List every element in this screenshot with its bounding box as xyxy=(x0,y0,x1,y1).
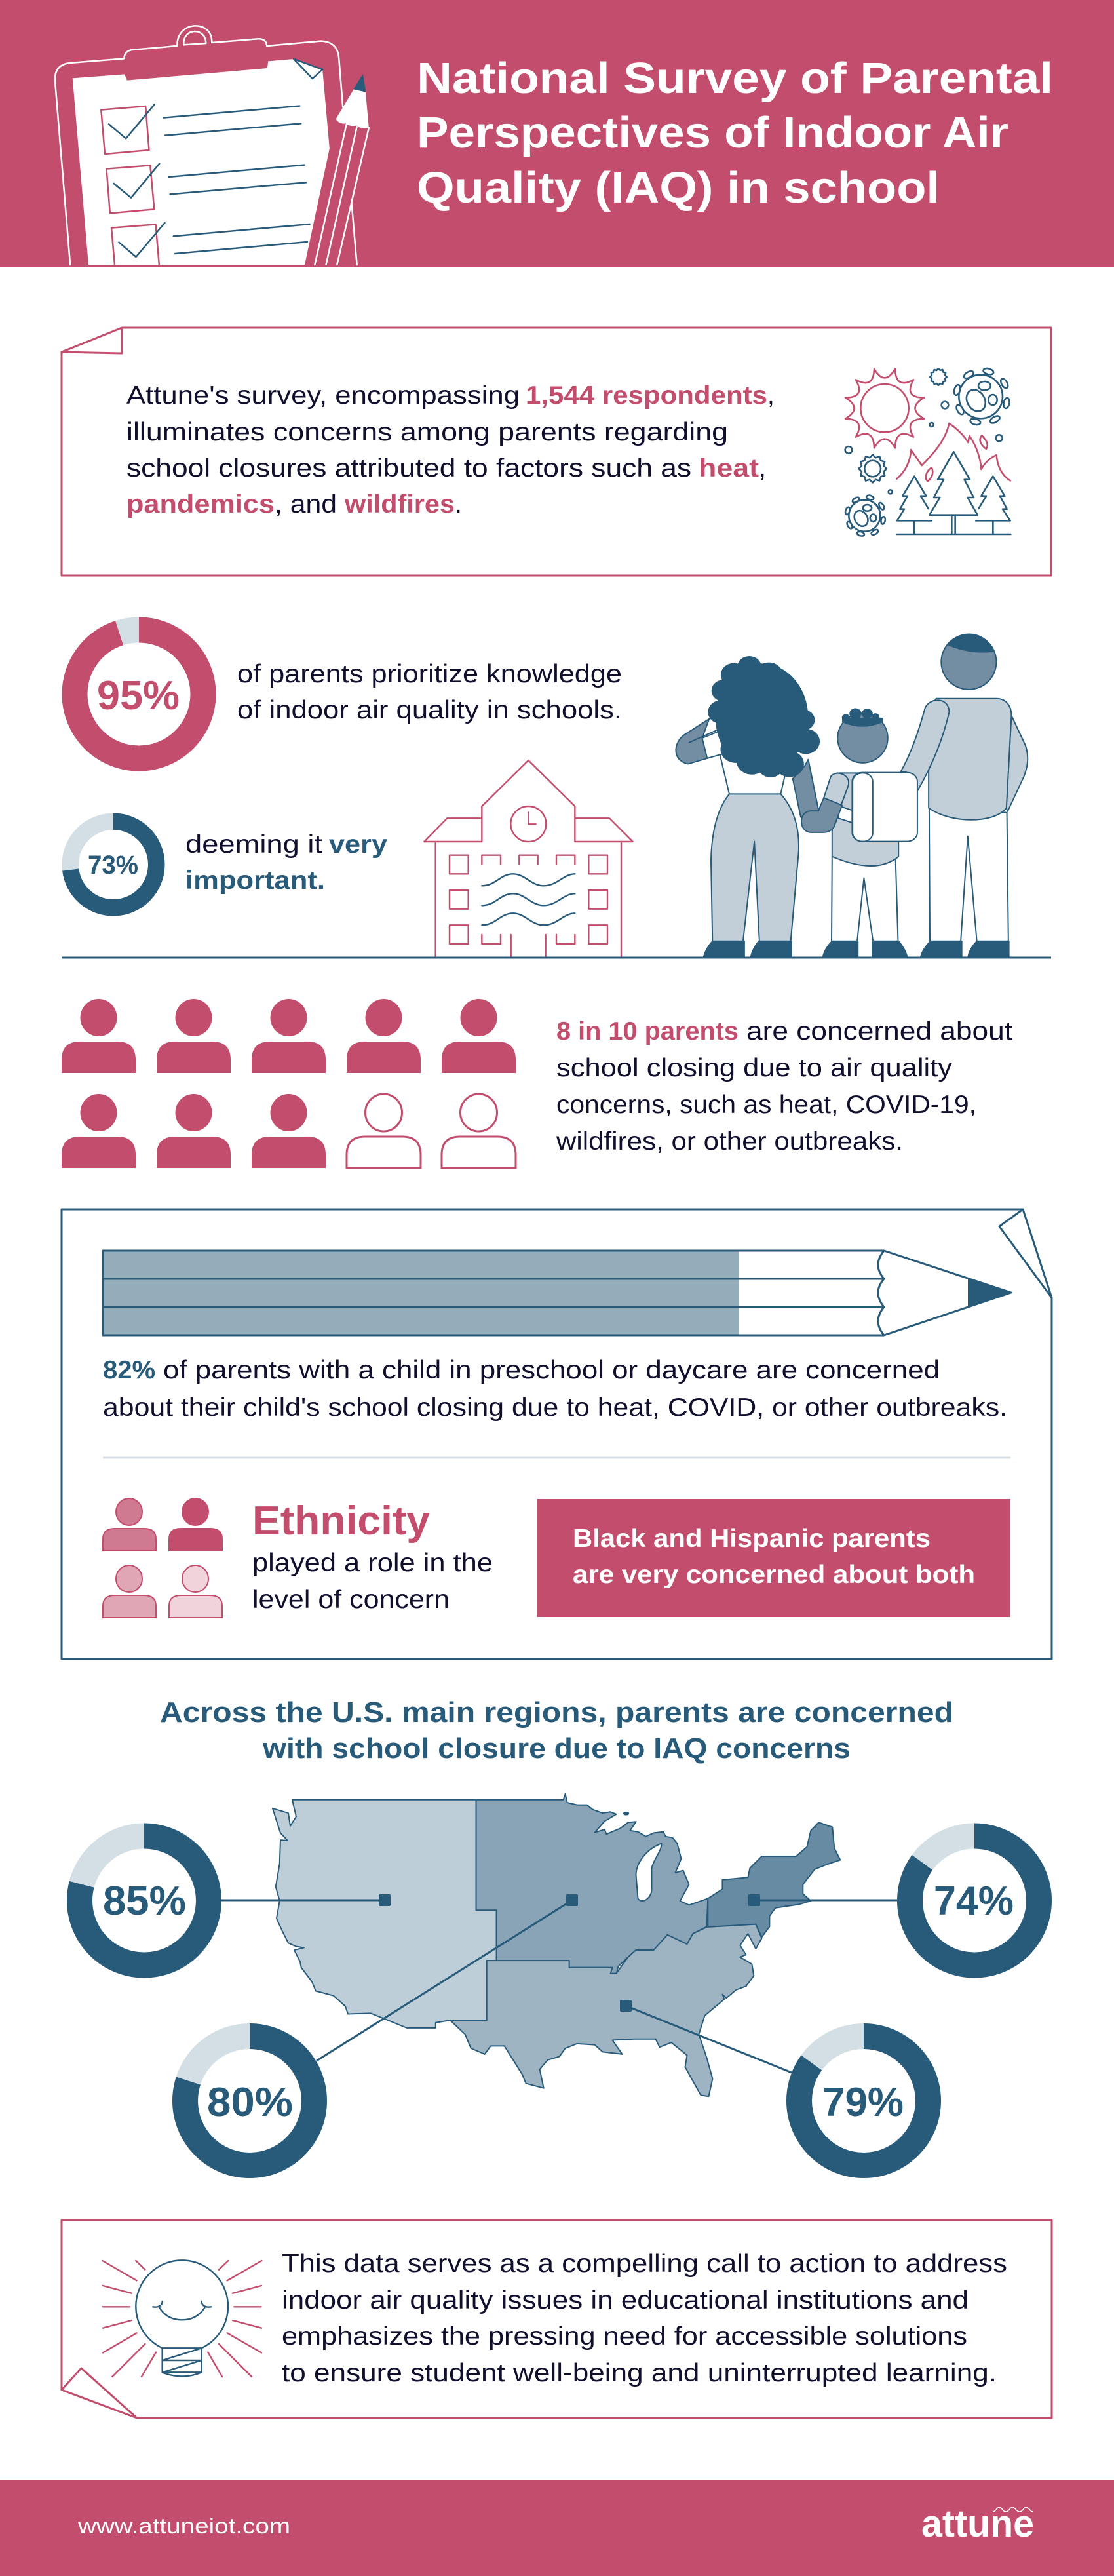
chart: Northeast donut 74% xyxy=(910,1836,1039,1965)
panel: call to action xyxy=(62,2220,1052,2418)
region: Midwest xyxy=(476,1794,708,1974)
text: 8 in 10 parents: school closing due to air quality xyxy=(556,1054,953,1082)
panel: preschool and ethnicity xyxy=(62,1209,1052,1659)
illustration: family seen from behind xyxy=(676,634,1028,958)
text: ethnicity: level of concern xyxy=(252,1586,450,1614)
text: 82% of parents: about their child's school closing due to heat, COVID, or other outbreaks. xyxy=(103,1394,1007,1422)
man xyxy=(900,634,1028,958)
intro text: heat xyxy=(699,454,759,482)
icon: smiling light bulb xyxy=(102,2260,261,2377)
chart: 73% donut: 73% xyxy=(88,851,138,880)
lake michigan xyxy=(636,1843,661,1901)
title: Perspectives of Indoor Air xyxy=(417,108,1008,157)
intro text xyxy=(126,381,775,518)
chart: South donut 79%: 79% xyxy=(822,2080,904,2125)
region: Northeast xyxy=(708,1822,840,1937)
chart: 95% donut xyxy=(75,630,203,758)
chart: West donut 85%: 85% xyxy=(103,1879,186,1924)
chart: West donut 85% xyxy=(80,1836,208,1965)
intro text: Attune's survey, encompassing xyxy=(126,381,520,410)
callout: Black and Hispanic parents: are very concerned about both xyxy=(573,1561,975,1589)
heading: regions: Across the U.S. main regions, parents are concerned xyxy=(160,1696,953,1728)
woman xyxy=(676,656,820,958)
text: 8 in 10 parents xyxy=(556,1017,1012,1156)
heading: regions: with school closure due to IAQ concerns xyxy=(262,1732,851,1765)
callout: Black and Hispanic parents xyxy=(537,1499,1010,1617)
panel outline with folded corner xyxy=(62,328,1051,576)
chart: 95% donut: 95% xyxy=(97,673,180,718)
intro text: , and xyxy=(275,490,337,518)
text: 82% of parents: of parents with a child in preschool or daycare are concerned xyxy=(163,1356,940,1384)
title: Quality (IAQ) in school xyxy=(417,163,940,212)
header banner xyxy=(0,0,1114,267)
text: 82% of parents xyxy=(103,1356,1007,1422)
intro text: pandemics xyxy=(126,490,275,518)
text: 8 in 10 parents: wildfires, or other outbreaks. xyxy=(556,1127,903,1156)
text: deeming it very important: deeming it xyxy=(185,830,322,859)
text: 8 in 10 parents: concerns, such as heat, COVID-19, xyxy=(556,1091,976,1119)
region: South xyxy=(450,1924,761,2096)
chart: South donut 79% xyxy=(799,2036,928,2166)
chart: Midwest donut 80% xyxy=(185,2036,315,2166)
intro text: , xyxy=(767,381,775,410)
chart: pencil progress bar 82% xyxy=(103,1251,1011,1335)
callout: Black and Hispanic parents: Black and Hispanic parents xyxy=(573,1525,931,1553)
icon: four people in varying shades xyxy=(103,1498,222,1618)
text: 95% of parents: of indoor air quality in schools. xyxy=(237,696,622,724)
intro text: , xyxy=(759,454,766,482)
icon: school building xyxy=(424,760,633,958)
text: ethnicity xyxy=(252,1498,493,1614)
chart: 73% donut xyxy=(70,821,157,908)
intro text: . xyxy=(455,490,462,518)
title: National Survey of Parental xyxy=(417,54,1053,103)
connector lines and markers xyxy=(221,1894,897,2073)
text: ethnicity: played a role in the xyxy=(252,1549,493,1577)
icon: sun, viruses, wildfire and trees xyxy=(845,367,1010,537)
text: deeming it very important: very xyxy=(329,830,387,859)
child xyxy=(801,708,917,958)
text: 8 in 10 parents: are concerned about xyxy=(746,1017,1012,1045)
text: ethnicity: Ethnicity xyxy=(252,1498,431,1544)
text: call to action xyxy=(282,2250,1007,2387)
intro text: 1,544 respondents xyxy=(526,381,767,410)
text: call to action: This data serves as a compelling call to action to address xyxy=(282,2250,1007,2278)
isle royale xyxy=(623,1812,629,1816)
chart: Midwest donut 80%: 80% xyxy=(207,2080,293,2125)
footer xyxy=(0,2480,1114,2576)
text: 8 in 10 parents: 8 in 10 parents xyxy=(556,1017,739,1045)
website: www.attuneiot.com xyxy=(77,2514,290,2538)
icon: clipboard with checklist and pencil xyxy=(55,26,369,265)
text: 95% of parents xyxy=(237,660,622,724)
text: 95% of parents: of parents prioritize knowledge xyxy=(237,660,622,688)
intro text: illuminates concerns among parents regarding xyxy=(126,418,728,446)
text: 82% of parents: 82% xyxy=(103,1356,155,1384)
map: contiguous US by region xyxy=(273,1794,840,2096)
ground line xyxy=(62,957,1051,958)
text: deeming it very important: important. xyxy=(185,867,325,895)
panel outline with folded corner xyxy=(62,1209,1052,1659)
title xyxy=(417,54,1053,212)
panel: intro survey summary xyxy=(62,328,1051,576)
text: call to action: emphasizes the pressing need for accessible solutions xyxy=(282,2322,967,2351)
intro text: wildfires xyxy=(344,490,455,518)
text: deeming it very important xyxy=(185,830,387,895)
chart: Northeast donut 74%: 74% xyxy=(934,1879,1014,1924)
text: call to action: to ensure student well-being and uninterrupted learning. xyxy=(282,2359,997,2387)
text: call to action: indoor air quality issues in educational institutions and xyxy=(282,2286,969,2314)
heading: regions xyxy=(160,1696,953,1765)
region: West xyxy=(273,1800,497,2028)
logo: attune: attune xyxy=(921,2503,1034,2545)
pictogram: 8 of 10 parents xyxy=(62,999,516,1168)
panel outline with folded corner xyxy=(62,2220,1052,2418)
intro text: school closures attributed to factors such as xyxy=(126,454,691,482)
